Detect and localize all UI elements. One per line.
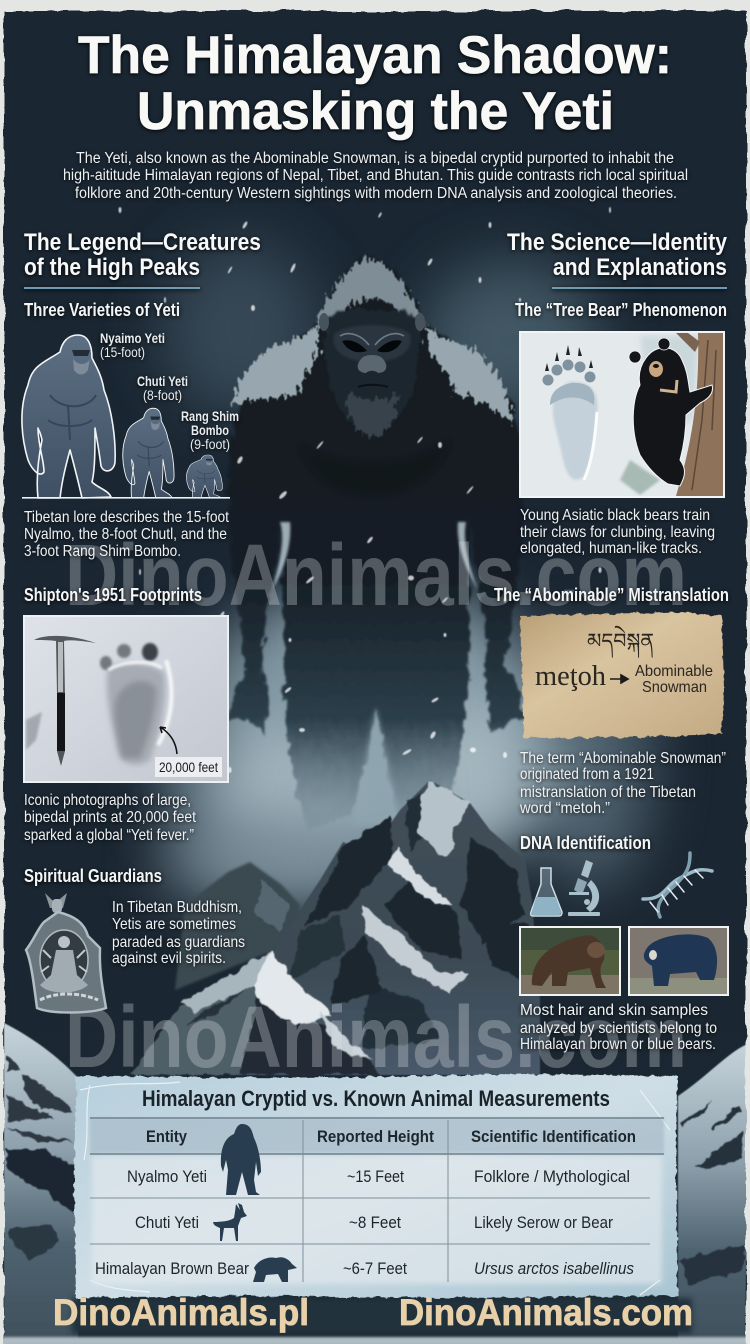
tree trunk xyxy=(676,333,723,496)
parchment: metoh translation: མདབེསྐན xyxy=(587,625,654,658)
text: most hair and skin: Himalayan brown or blue bears. xyxy=(520,1036,716,1053)
heading: shipton: Shipton's 1951 Footprints xyxy=(24,585,202,605)
text: iconic photographs: sparked a global “Yeti fever.” xyxy=(24,827,194,844)
callout: 20,000 feet: 20,000 feet xyxy=(159,759,218,775)
mountain snow ridges xyxy=(362,780,470,992)
mountains behind the table xyxy=(130,780,540,1075)
text: young asiatic black bears xyxy=(520,507,715,557)
text: the term: mistranslation of the Tibetan xyxy=(520,784,696,801)
yeti snow-dusted crown and shoulders xyxy=(232,258,515,825)
table row: chuti yeti: ~8 Feet xyxy=(349,1213,401,1232)
table header row xyxy=(146,1127,636,1146)
title: Unmasking the Yeti xyxy=(137,82,614,141)
photo: bear track and climbing bear xyxy=(520,332,724,497)
table row: nyalmo yeti: ~15 Feet xyxy=(347,1167,404,1186)
table row: nyalmo yeti xyxy=(127,1124,630,1195)
intro paragraph: The Yeti, also known as the Abominable Snowman, is a bipedal cryptid purported to inhabit the xyxy=(76,150,674,167)
icon: ice axe xyxy=(34,636,96,766)
parchment: metoh translation: meţoh xyxy=(535,661,606,692)
table row: brown bear: Ursus arctos isabellinus xyxy=(474,1259,634,1278)
snowy foreground flanks xyxy=(0,1023,750,1344)
arrow: to footprint xyxy=(160,727,177,754)
table row: chuti yeti: Chuti Yeti xyxy=(135,1213,199,1232)
text: tibetan lore: 3-foot Rang Shim Bombo. xyxy=(24,543,181,560)
text: iconic photographs xyxy=(24,792,196,844)
chart: yeti size comparison xyxy=(22,331,239,499)
central yeti figure xyxy=(228,256,524,830)
icon: dna helix xyxy=(643,853,712,917)
table header row: Reported Height xyxy=(317,1127,434,1146)
parchment: metoh translation: Snowman xyxy=(642,679,707,696)
text: tibetan lore: Tibetan lore describes the 15-foot xyxy=(24,509,229,526)
callout: 20,000 feet xyxy=(155,757,222,777)
table row: brown bear: Himalayan Brown Bear xyxy=(95,1259,249,1278)
chart: yeti size comparison: Bombo xyxy=(191,423,229,438)
table row: nyalmo yeti: Folklore / Mythological xyxy=(474,1167,630,1186)
panel: measurements table xyxy=(74,1074,678,1298)
text: tibetan lore xyxy=(24,509,229,560)
text: most hair and skin: analyzed by scientists belong to xyxy=(520,1020,717,1037)
table row: chuti yeti xyxy=(135,1203,613,1241)
text: the term: originated from a 1921 xyxy=(520,766,654,783)
icon: footprint xyxy=(100,643,172,765)
intro paragraph: folklore and 20th-century Western sightings with modern DNA analysis and zoological theories. xyxy=(75,185,677,202)
chart: yeti size comparison: Nyaimo Yeti xyxy=(100,331,165,346)
panel: the legend heading: The Legend—Creatures xyxy=(24,229,261,256)
photo: footprint and ice axe xyxy=(24,616,228,782)
text: the term: word “metoh.” xyxy=(519,800,610,817)
text: iconic photographs: Iconic photographs of large, xyxy=(24,792,191,809)
panel: the science heading: and Explanations xyxy=(553,254,727,281)
icon: black bear xyxy=(629,338,712,486)
parchment: metoh translation xyxy=(520,612,724,738)
text: iconic photographs: bipedal prints at 20,000 feet xyxy=(24,809,196,826)
text: tibetan buddhism: In Tibetan Buddhism, xyxy=(112,899,242,916)
left snowy peak xyxy=(130,952,380,1075)
panel: the legend heading: of the High Peaks xyxy=(24,254,200,281)
photo: blue bear xyxy=(629,927,728,995)
icon: silver pendant xyxy=(26,893,106,1012)
table row: chuti yeti: Likely Serow or Bear xyxy=(474,1213,613,1232)
footer watermark: DinoAnimals.com: DinoAnimals.com xyxy=(399,1292,693,1333)
intro paragraph xyxy=(63,150,688,202)
photo: brown bear xyxy=(520,927,620,995)
text: young asiatic black bears: their claws for clunbing, leaving xyxy=(520,524,715,541)
table title: Himalayan Cryptid vs. Known Animal Measurements xyxy=(142,1086,610,1111)
icon: serow silhouette xyxy=(213,1203,247,1241)
text: tibetan buddhism xyxy=(112,899,245,967)
intro paragraph: high-aititude Himalayan regions of Nepal, Tibet, and Bhutan. This guide contrasts rich local spiritual xyxy=(63,167,688,184)
yeti face xyxy=(319,309,425,438)
table header row: Scientific Identification xyxy=(471,1127,636,1146)
text: tibetan buddhism: Yetis are sometimes xyxy=(112,916,236,933)
parchment: metoh translation: Abominable xyxy=(635,663,713,680)
text: young asiatic black bears: Young Asiatic black bears train xyxy=(520,507,710,524)
table row: nyalmo yeti: Nyalmo Yeti xyxy=(127,1167,207,1186)
panel: the science heading xyxy=(507,229,727,289)
icon: microscope xyxy=(568,860,600,916)
panel: the legend heading xyxy=(24,229,261,289)
mountain dark rock faces xyxy=(290,795,530,1050)
falling snow xyxy=(118,207,611,773)
chart: yeti size comparison: Rang Shim xyxy=(181,409,239,424)
chart: yeti size comparison: (9-foot) xyxy=(190,437,230,452)
chart: yeti size comparison: Chuti Yeti xyxy=(137,374,188,389)
table row: brown bear: ~6-7 Feet xyxy=(343,1259,407,1278)
icon: flask xyxy=(531,868,562,916)
text: most hair and skin xyxy=(520,1002,717,1053)
heading: spiritual guardians: Spiritual Guardians xyxy=(24,866,162,886)
text: most hair and skin: Most hair and skin samples xyxy=(520,1002,708,1019)
icon: bear silhouette xyxy=(253,1257,297,1282)
footer watermark: DinoAnimals.pl: DinoAnimals.pl xyxy=(53,1292,309,1333)
table row: brown bear xyxy=(95,1257,634,1282)
text: tibetan buddhism: paraded as guardians xyxy=(112,934,245,951)
title: The Himalayan Shadow: xyxy=(78,26,672,85)
heading: dna identification: DNA Identification xyxy=(520,833,651,853)
heading: three varieties: Three Varieties of Yeti xyxy=(24,300,180,320)
text: tibetan buddhism: against evil spirits. xyxy=(112,950,226,967)
table header row: Entity xyxy=(146,1127,187,1146)
icon: paw print xyxy=(542,345,598,480)
text: young asiatic black bears: elongated, human-like tracks. xyxy=(520,540,702,557)
text: the term xyxy=(519,750,726,817)
text: tibetan lore: Nyalmo, the 8-foot Chutl, and the xyxy=(24,526,227,543)
icon: yeti silhouette xyxy=(221,1124,261,1195)
chart: yeti size comparison: (8-foot) xyxy=(143,388,182,403)
arrow: translates to xyxy=(610,675,628,683)
title xyxy=(78,26,672,141)
chart: yeti size comparison: (15-foot) xyxy=(100,345,145,360)
